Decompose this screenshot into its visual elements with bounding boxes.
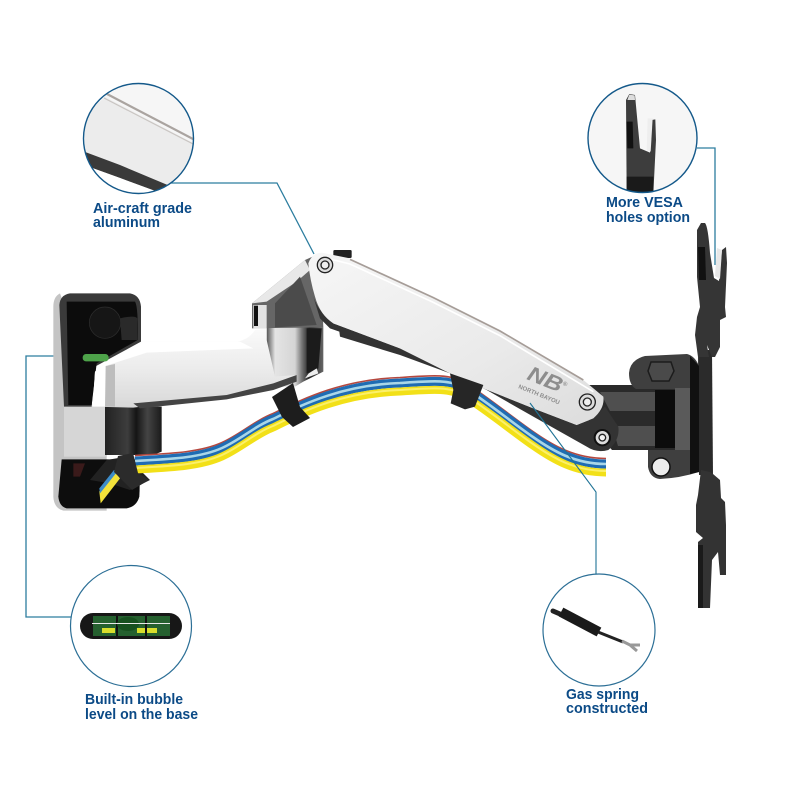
logo [517,362,568,406]
dark underside [313,297,619,451]
callout line: gas spring [530,403,596,574]
logo: NB [524,362,566,397]
lower post [105,407,162,455]
VESA bottom fork [696,470,726,608]
bracket plate [629,354,699,479]
arm underside [133,375,297,408]
caption: Air-craft grade [93,200,192,217]
caption: Built-in bubble [85,691,183,708]
panel: air-craft grade aluminum [82,82,194,227]
arm body [93,328,297,408]
elbow block [252,253,323,328]
green level window [83,354,109,361]
caption: More VESA [606,194,683,211]
bolt lower [595,430,610,445]
cable strap left [272,383,310,427]
logo: NORTH BAYOU [517,384,560,406]
cable strap base [114,453,149,490]
wall plate [53,293,162,511]
caption: holes option [606,209,690,226]
hex bolt [648,362,674,381]
logo: ® [563,381,568,388]
lower arm [93,253,323,408]
panel: more VESA holes option [585,80,700,226]
VESA top fork [695,223,727,357]
strap under arm [450,373,483,409]
caption: level on the base [85,706,198,723]
upper arm [308,250,619,451]
callout lines [26,148,715,617]
caption: Gas spring [566,686,639,703]
tilt arm [586,385,680,450]
bottom housing [58,457,150,508]
caption: aluminum [93,214,160,231]
caption: constructed [566,700,648,717]
vertical chrome joint [267,327,323,387]
panel: built-in bubble level [70,566,198,723]
top button [333,250,352,258]
icon: bubble level [80,613,182,639]
VESA stem [698,350,713,475]
mounting hole [652,458,670,476]
bolt right [579,394,595,410]
cables [135,376,606,472]
icon: gas spring [553,611,640,651]
panel: gas spring [543,574,655,717]
top housing [59,293,141,407]
swivel bracket and VESA mount [586,223,727,608]
silver plate [308,253,604,425]
bolt top [317,257,333,273]
